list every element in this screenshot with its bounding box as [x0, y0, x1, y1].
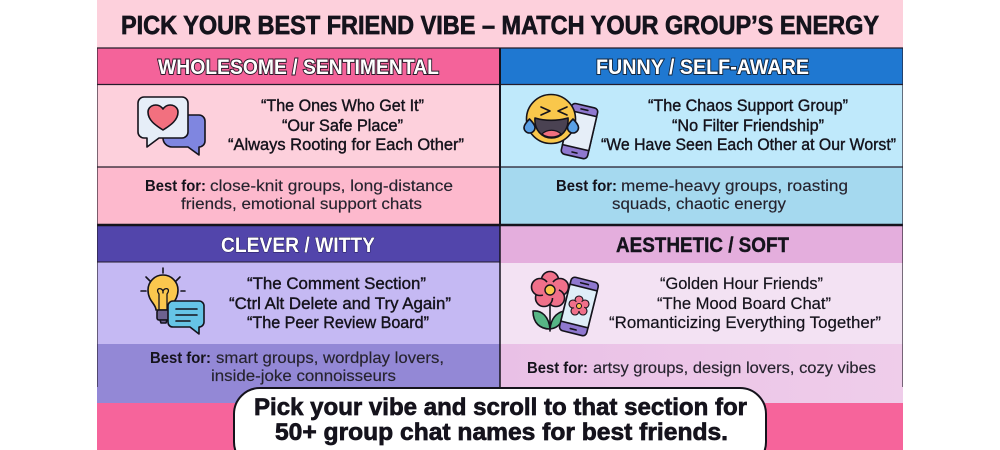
icon: flower and phone	[532, 272, 599, 337]
panel: wholesome / sentimental	[97, 48, 500, 225]
quotes: aesthetic: “Golden Hour Friends”	[660, 275, 823, 293]
icon: laughing face with phone	[524, 94, 598, 159]
bottom banner	[97, 403, 903, 450]
best for: funny	[500, 167, 903, 225]
quotes: clever: “Ctrl Alt Delete and Try Again”	[229, 295, 451, 313]
quotes: aesthetic: “Romanticizing Everything Together”	[609, 314, 881, 332]
quotes: aesthetic	[609, 275, 881, 332]
best for: funny: Best for:	[556, 178, 617, 195]
quotes: wholesome: “Always Rooting for Each Other”	[228, 136, 464, 154]
quotes: wholesome	[228, 97, 464, 154]
best for: funny: squads, chaotic energy	[612, 196, 786, 213]
callout: Pick your vibe and scroll to that section for	[254, 394, 747, 421]
quotes: wholesome: “The Ones Who Get It”	[261, 97, 424, 115]
quotes: wholesome: “Our Safe Place”	[282, 117, 403, 135]
best for: wholesome: Best for:	[145, 178, 206, 195]
best for: wholesome: close-knit groups, long-distance	[210, 178, 453, 195]
title	[97, 0, 903, 48]
title: PICK YOUR BEST FRIEND VIBE – MATCH YOUR GROUP’S ENERGY	[121, 12, 879, 40]
best for: clever: smart groups, wordplay lovers,	[216, 350, 444, 367]
quotes: clever: “The Comment Section”	[247, 275, 426, 293]
header: funny: FUNNY / SELF-AWARE	[596, 55, 809, 79]
icon: light bulb with chat bubble	[141, 268, 204, 334]
panel: funny / self-aware	[500, 48, 903, 225]
header: wholesome	[97, 48, 500, 84]
panel: aesthetic / soft	[500, 225, 903, 403]
best for: clever	[97, 344, 500, 403]
best for: wholesome: friends, emotional support chats	[181, 196, 422, 213]
quotes: funny: “We Have Seen Each Other at Our Worst”	[601, 136, 896, 154]
best for: aesthetic	[500, 344, 903, 403]
quotes: funny	[601, 97, 896, 154]
header: funny	[500, 48, 903, 84]
callout: 50+ group chat names for best friends.	[275, 419, 728, 446]
quotes: funny: “No Filter Friendship”	[672, 117, 824, 135]
header: aesthetic	[500, 225, 903, 263]
best for: wholesome	[97, 167, 500, 225]
best for: clever: inside-joke connoisseurs	[211, 368, 396, 385]
best for: funny: meme-heavy groups, roasting	[621, 178, 848, 195]
quotes: funny: “The Chaos Support Group”	[648, 97, 848, 115]
best for: aesthetic: artsy groups, design lovers, cozy vibes	[593, 360, 876, 377]
header: clever	[97, 225, 500, 262]
header: clever: CLEVER / WITTY	[221, 233, 375, 257]
icon: chat bubbles with heart	[138, 97, 205, 155]
quotes: aesthetic: “The Mood Board Chat”	[657, 295, 831, 313]
best for: clever: Best for:	[150, 350, 211, 367]
header: wholesome: WHOLESOME / SENTIMENTAL	[158, 55, 439, 79]
best for: aesthetic: Best for:	[527, 360, 588, 377]
header: aesthetic: AESTHETIC / SOFT	[616, 233, 789, 257]
panel: clever / witty	[97, 225, 500, 403]
quotes: clever	[229, 275, 451, 332]
callout	[234, 388, 766, 450]
quotes: clever: “The Peer Review Board”	[247, 314, 429, 332]
